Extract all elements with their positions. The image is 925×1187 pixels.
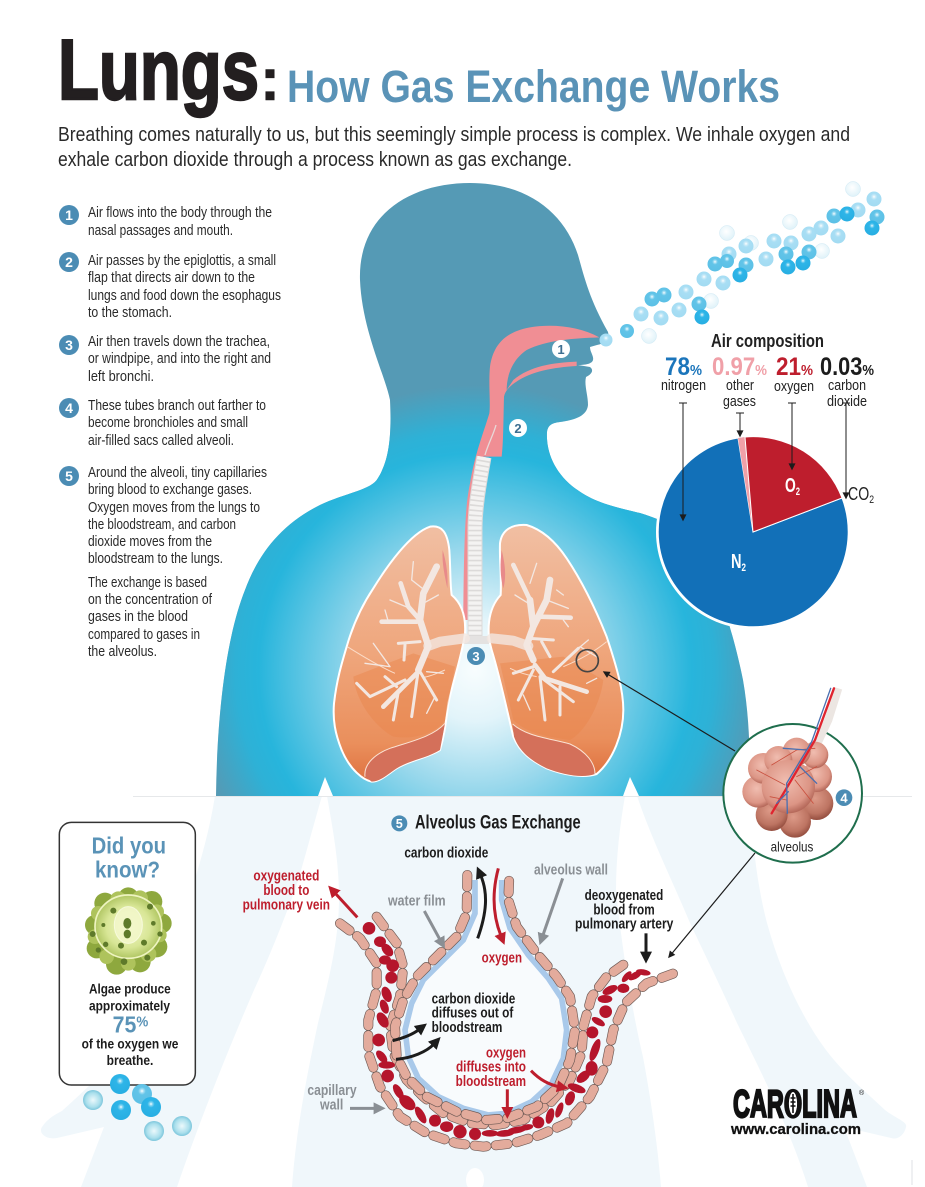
red blood cells bbox=[363, 922, 651, 1140]
step 4: air-filled sacs called alveoli. bbox=[88, 433, 234, 449]
label: oxygen diffuses bbox=[456, 1045, 526, 1090]
arrow: oxygenated blood out bbox=[335, 893, 357, 917]
right bronchial tree bbox=[492, 563, 597, 720]
step 3: left bronchi. bbox=[88, 369, 154, 385]
human silhouette: head and torso bbox=[216, 183, 750, 796]
step 5: Oxygen moves from the lungs to bbox=[88, 500, 260, 516]
pie chart: air composition: 2 bbox=[869, 494, 874, 506]
card text bbox=[82, 980, 179, 1068]
step badge 1 bbox=[59, 205, 79, 225]
arrow: carbon dioxide diffusion 2 bbox=[396, 1044, 434, 1059]
step 5: Around the alveoli, tiny capillaries bbox=[88, 465, 267, 481]
step 2: Air passes by the epiglottis, a small bbox=[88, 253, 276, 269]
arrow: oxygen diffusion 2 bbox=[503, 1089, 512, 1109]
label: deoxygenated blood: blood from bbox=[593, 902, 655, 918]
step 3: Air then travels down the trachea, bbox=[88, 334, 270, 350]
card text: breathe. bbox=[107, 1052, 153, 1068]
pale lower body silhouette bbox=[41, 796, 906, 1187]
right lung bbox=[489, 525, 623, 776]
label: capillary wall: wall bbox=[319, 1097, 343, 1113]
label: carbon dioxide diffuses: diffuses out of bbox=[432, 1006, 513, 1022]
card text: Algae produce bbox=[89, 980, 171, 996]
pie labels: O bbox=[785, 475, 801, 497]
arrow: carbon dioxide up bbox=[478, 875, 486, 938]
arrow: oxygen diffusion 1 bbox=[531, 1071, 559, 1087]
badge 3 at trachea split: 3 bbox=[472, 649, 480, 664]
arrow: deoxygenated blood in bbox=[641, 933, 650, 954]
label: deoxygenated blood: pulmonary artery bbox=[575, 917, 674, 933]
label: oxygen diffuses: diffuses into bbox=[456, 1060, 526, 1076]
step badge 5 bbox=[59, 466, 79, 486]
step 5: the alveolus. bbox=[88, 644, 157, 660]
badge 2 on throat: 2 bbox=[514, 421, 522, 436]
slice: oxygen bbox=[745, 437, 842, 532]
pie labels: 2 bbox=[742, 562, 746, 574]
icon: algae cell bbox=[85, 887, 172, 975]
navel bbox=[466, 1168, 484, 1187]
step 2: to the stomach. bbox=[88, 305, 172, 321]
pie labels: 2 bbox=[796, 486, 800, 498]
exhaled air bubbles bbox=[600, 182, 884, 346]
badge 1 in airway: 1 bbox=[557, 342, 565, 357]
badge 4: 4 bbox=[840, 790, 848, 805]
label: oxygenated blood bbox=[243, 869, 330, 913]
step 3 bbox=[59, 334, 271, 385]
other gases stat: gases bbox=[723, 394, 756, 410]
arrow from alveolus callout to capillary bbox=[669, 853, 755, 957]
label: water film: water film bbox=[387, 894, 446, 910]
pie chart: air composition bbox=[656, 435, 874, 629]
label: oxygenated blood: pulmonary vein bbox=[243, 897, 330, 913]
step 4 bbox=[59, 398, 266, 449]
oxygen bubbles under card bbox=[83, 1074, 192, 1141]
step badge 3 bbox=[59, 335, 79, 355]
bronchiole tube bbox=[817, 688, 838, 745]
diagram heading: 5 bbox=[396, 817, 403, 831]
blood vessels bbox=[757, 688, 834, 813]
step badge 3: 3 bbox=[65, 337, 73, 353]
label: carbon dioxide: carbon dioxide bbox=[404, 845, 488, 861]
trachea bbox=[464, 457, 490, 644]
other gases stat: 0.97% bbox=[712, 353, 767, 381]
arrow: carbon dioxide diffusion 1 bbox=[393, 1029, 419, 1041]
card text: of the oxygen we bbox=[82, 1035, 179, 1051]
intro paragraph: exhale carbon dioxide through a process known as gas exchange. bbox=[58, 149, 572, 171]
label: oxygen diffuses: oxygen bbox=[486, 1045, 526, 1061]
label: alveolus wall: alveolus wall bbox=[534, 862, 608, 878]
step 3: or windpipe, and into the right and bbox=[88, 351, 271, 367]
step 1: Air flows into the body through the bbox=[88, 205, 272, 221]
arrow: capillary wall bbox=[350, 1104, 376, 1113]
title: : bbox=[260, 46, 280, 113]
pie leader arrows bbox=[679, 403, 850, 520]
label: deoxygenated blood bbox=[575, 888, 674, 933]
pie labels: N bbox=[731, 551, 745, 573]
oxygen stat: 21% bbox=[776, 353, 813, 381]
75 percent stat: % bbox=[136, 1015, 148, 1031]
pie chart: air composition: CO bbox=[848, 484, 875, 504]
step badge 4 bbox=[59, 398, 79, 418]
alveolus label: alveolus bbox=[771, 839, 813, 855]
step 1 bbox=[59, 205, 272, 239]
left lung bbox=[334, 526, 465, 782]
carbon dioxide stat: carbon bbox=[828, 378, 866, 394]
diagram heading: Alveolus Gas Exchange bbox=[415, 812, 581, 833]
diagram arrows bbox=[335, 868, 646, 1109]
arrow: oxygen down bbox=[494, 868, 501, 936]
step 2: flap that directs air down to the bbox=[88, 270, 255, 286]
nitrogen stat: nitrogen bbox=[661, 378, 706, 394]
75 percent stat: 75 bbox=[113, 1012, 139, 1038]
card heading: know? bbox=[95, 857, 160, 883]
step badge 1: 1 bbox=[65, 207, 73, 223]
label: oxygenated blood: blood to bbox=[263, 883, 309, 899]
diagram heading bbox=[391, 812, 581, 833]
card heading bbox=[92, 832, 166, 883]
step 5: compared to gases in bbox=[88, 627, 200, 643]
step 5: bring blood to exchange gases. bbox=[88, 482, 252, 498]
badge 1 in airway bbox=[552, 340, 570, 358]
label: capillary wall bbox=[307, 1083, 357, 1113]
card text: approximately bbox=[89, 998, 170, 1014]
Carolina logo: ® bbox=[859, 1089, 865, 1097]
badge 2 on throat bbox=[509, 419, 527, 437]
step badge 2 bbox=[59, 252, 79, 272]
step badge 2: 2 bbox=[65, 254, 73, 270]
label: oxygen diffuses: bloodstream bbox=[456, 1074, 526, 1090]
other gases stat: other bbox=[726, 378, 754, 394]
step 5: The exchange is based bbox=[88, 575, 207, 591]
lung magnifier ring bbox=[576, 650, 598, 672]
card heading: Did you bbox=[92, 832, 166, 858]
alveolus wall cells bbox=[395, 875, 575, 1120]
Carolina logo bbox=[730, 1083, 865, 1138]
slice: other gases bbox=[738, 437, 753, 532]
label: oxygenated blood: oxygenated bbox=[253, 869, 319, 885]
step 2 bbox=[59, 252, 281, 321]
step badge 5: 5 bbox=[65, 468, 73, 484]
intro paragraph bbox=[58, 124, 850, 171]
air composition heading: Air composition bbox=[711, 331, 824, 351]
airway: nasal passage, mouth and esophagus bbox=[463, 326, 599, 620]
oxygen stat: oxygen bbox=[774, 379, 814, 395]
title: Lungs bbox=[58, 23, 259, 118]
label: carbon dioxide diffuses bbox=[432, 991, 515, 1036]
step 5: gases in the blood bbox=[88, 609, 188, 625]
title: How Gas Exchange Works bbox=[287, 61, 780, 112]
capillary wall cells bbox=[340, 917, 678, 1147]
armpit gaps bbox=[318, 777, 639, 796]
did you know card bbox=[59, 822, 195, 1085]
alveolus magnified callout bbox=[723, 688, 862, 863]
slice: nitrogen bbox=[658, 438, 848, 627]
label: deoxygenated blood: deoxygenated bbox=[585, 888, 663, 904]
oxygen stat bbox=[774, 353, 814, 395]
carbon dioxide stat: dioxide bbox=[827, 394, 867, 410]
arrow from lung to alveolus bbox=[604, 672, 735, 751]
label: carbon dioxide diffuses: carbon dioxide bbox=[432, 991, 515, 1007]
step 5: dioxide moves from the bbox=[88, 534, 212, 550]
alveolar cluster bbox=[742, 738, 833, 838]
step 5: the bloodstream, and carbon bbox=[88, 517, 236, 533]
pie labels bbox=[731, 475, 800, 574]
step 5: bloodstream to the lungs. bbox=[88, 551, 223, 567]
carbon dioxide stat bbox=[820, 353, 874, 410]
title bbox=[58, 23, 780, 118]
arrow: water film bbox=[424, 911, 440, 940]
nitrogen stat: 78% bbox=[665, 353, 702, 381]
label: oxygen: oxygen bbox=[482, 950, 522, 966]
step 1: nasal passages and mouth. bbox=[88, 223, 233, 239]
label: carbon dioxide diffuses: bloodstream bbox=[432, 1020, 502, 1036]
badge 4 bbox=[836, 789, 852, 806]
label: capillary wall: capillary bbox=[307, 1083, 357, 1099]
Carolina logo: www.carolina.com bbox=[730, 1121, 861, 1138]
lungs bbox=[334, 525, 623, 782]
crop mark bbox=[911, 1160, 913, 1185]
nitrogen stat bbox=[661, 353, 706, 394]
other gases stat bbox=[712, 353, 767, 410]
section divider bbox=[133, 796, 912, 797]
step 4: These tubes branch out farther to bbox=[88, 398, 266, 414]
step badge 4: 4 bbox=[65, 400, 73, 416]
badge 3 at trachea split bbox=[467, 647, 485, 665]
left bronchial tree bbox=[357, 562, 465, 720]
step 5 bbox=[59, 465, 267, 660]
water film and alveolus interior bbox=[405, 880, 567, 1115]
step 5: on the concentration of bbox=[88, 592, 213, 608]
alveolus gas exchange diagram bbox=[243, 812, 678, 1147]
carbon dioxide stat: 0.03% bbox=[820, 353, 874, 381]
step 4: become bronchioles and small bbox=[88, 415, 248, 431]
step 2: lungs and food down the esophagus bbox=[88, 288, 281, 304]
arrow: alveolus wall bbox=[543, 878, 563, 936]
